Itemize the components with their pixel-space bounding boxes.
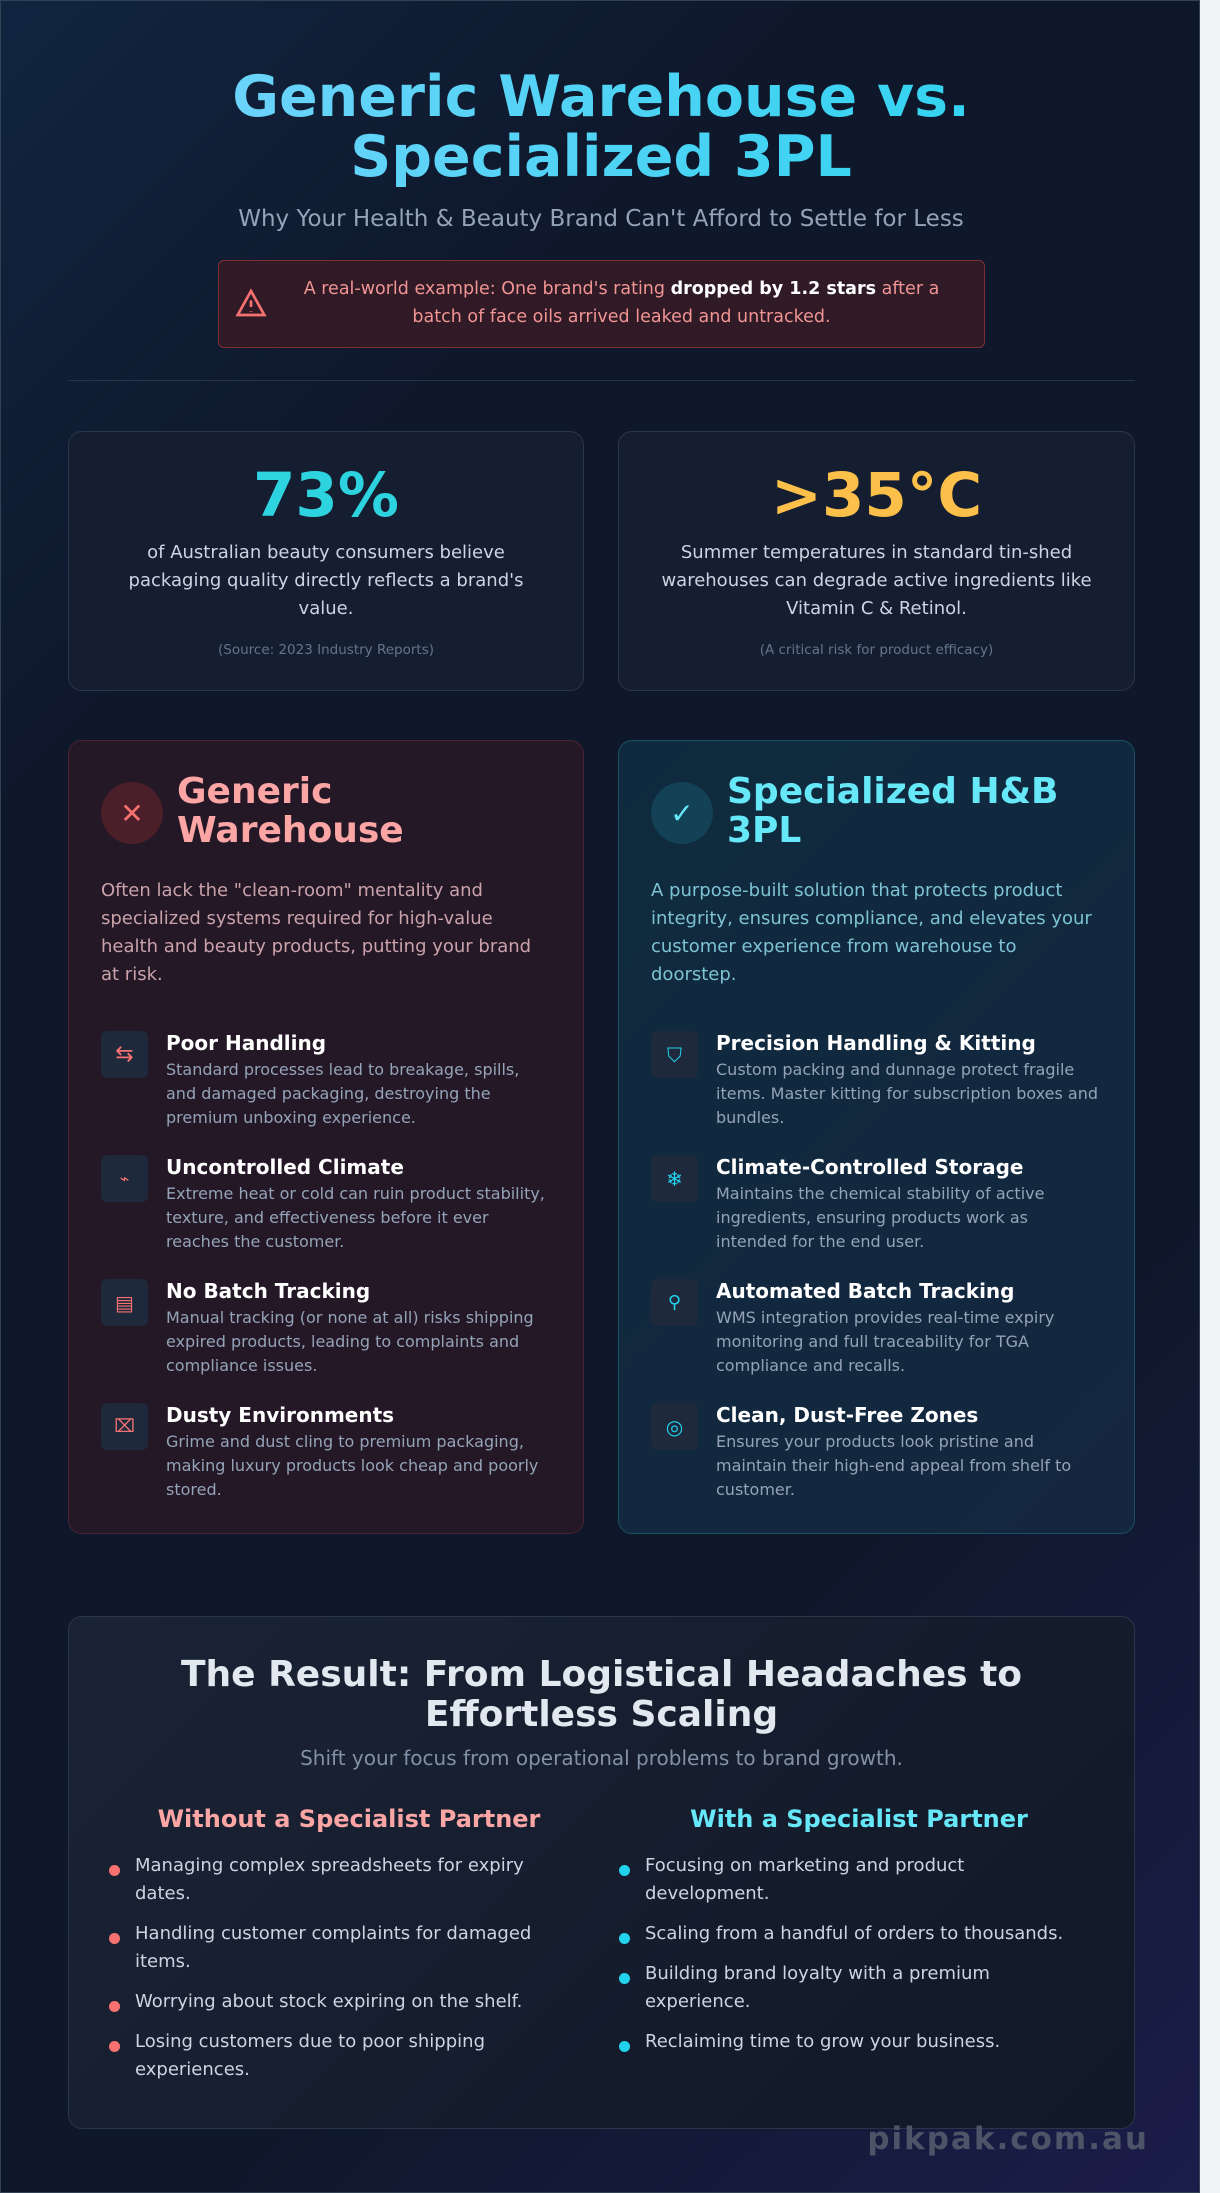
column: with: Scaling from a handful of orders to thousands. [645, 1923, 1063, 1944]
column: with: Focusing on marketing and product development. [645, 1855, 964, 1904]
item: climate storage: ❄ [666, 1166, 683, 1190]
heading: Generic [177, 771, 332, 812]
icon: x: ✕ [120, 796, 144, 830]
item: dust-free: ◎ [666, 1414, 683, 1438]
column: without: Worrying about stock expiring on the shelf. [135, 1991, 522, 2012]
item: dust-free [651, 1403, 1071, 1499]
column: with: Reclaiming time to grow your business. [645, 2031, 1000, 2052]
item: batch tracking: ⚲ [668, 1292, 681, 1313]
stat card: >35°C: Summer temperatures in standard tin-shed warehouses can degrade active ingredients like Vitamin C & Retinol. [661, 542, 1092, 619]
callout: real-world example: A real-world example: One brand's rating dropped by 1.2 stars after a batch of face oils arrived leaked and untracked. [304, 279, 939, 327]
column: with [619, 1805, 1063, 2052]
callout: real-world example [218, 260, 985, 348]
item: no batch tracking: ▤ [115, 1290, 134, 1314]
item: poor handling: Poor Handling [166, 1031, 326, 1055]
stat card: >35°C: (A critical risk for product efficacy) [760, 642, 993, 658]
icon: check [651, 782, 713, 844]
item: precision handling [651, 1031, 1098, 1127]
item: no batch tracking: Manual tracking (or none at all) risks shipping expired products, leading to complaints and compliance issues. [166, 1308, 534, 1375]
heading: 3PL [727, 810, 801, 851]
item: dust-free: Ensures your products look pristine and maintain their high-end appeal from shelf to customer. [716, 1432, 1071, 1499]
item: dusty environments: Grime and dust cling to premium packaging, making luxury products look cheap and poorly stored. [166, 1432, 538, 1499]
item: uncontrolled climate: ⌁ [120, 1169, 129, 1188]
heading: Effortless Scaling [425, 1694, 778, 1735]
column: with: With a Specialist Partner [690, 1805, 1028, 1833]
icon: x [101, 782, 163, 844]
stat card: 73%: 73% [253, 460, 399, 531]
icon: check: ✓ [670, 796, 694, 830]
heading [181, 1654, 1022, 1735]
item: precision handling: Precision Handling & Kitting [716, 1031, 1036, 1055]
item: uncontrolled climate: Extreme heat or cold can ruin product stability, texture, and effectiveness before it ever reaches the customer. [166, 1184, 545, 1251]
item: poor handling: Standard processes lead to breakage, spills, and damaged packaging, destroying the premium unboxing experience. [166, 1060, 519, 1127]
footer: brand: pikpak.com.au [867, 2121, 1149, 2157]
panel: generic warehouse [68, 740, 584, 1534]
item: batch tracking: Automated Batch Tracking [716, 1279, 1014, 1303]
column: without [109, 1805, 540, 2080]
heading [727, 771, 1058, 851]
description: Often lack the "clean-room" mentality and specialized systems required for high-value health and beauty products, putting your brand at risk. [101, 880, 531, 985]
column: without: Without a Specialist Partner [158, 1805, 540, 1833]
title: Generic Warehouse vs. [232, 64, 970, 130]
item: dusty environments: ⌧ [114, 1416, 135, 1437]
item: uncontrolled climate [101, 1155, 545, 1251]
column: with: Building brand loyalty with a premium experience. [645, 1963, 990, 2012]
item: climate storage [651, 1155, 1044, 1251]
subtitle: Why Your Health & Beauty Brand Can't Afford to Settle for Less [238, 206, 964, 232]
item: climate storage: Maintains the chemical stability of active ingredients, ensuring products work as intended for the end user. [716, 1184, 1044, 1251]
description: A purpose-built solution that protects product integrity, ensures compliance, and elevates your customer experience from warehouse to doorstep. [651, 880, 1092, 985]
heading: Specialized H&B [727, 771, 1058, 812]
heading [177, 771, 404, 851]
item: poor handling [101, 1031, 519, 1127]
title [1, 67, 1201, 187]
column: without: Losing customers due to poor shipping experiences. [135, 2031, 485, 2080]
item: climate storage: Climate-Controlled Storage [716, 1155, 1023, 1179]
stat card: 73%: of Australian beauty consumers believe packaging quality directly reflects a brand's value. [129, 542, 523, 619]
item: uncontrolled climate: Uncontrolled Climate [166, 1155, 404, 1179]
stat card: >35°C: >35°C [771, 460, 982, 531]
column: without: Managing complex spreadsheets for expiry dates. [135, 1855, 524, 1904]
stat card: 73%: (Source: 2023 Industry Reports) [218, 642, 434, 658]
item: precision handling: ⛉ [667, 1042, 682, 1066]
item: dusty environments: Dusty Environments [166, 1403, 394, 1427]
icon: warning [236, 288, 266, 316]
title: Specialized 3PL [350, 124, 852, 190]
heading: Warehouse [177, 810, 404, 851]
panel: the result [68, 1616, 1135, 2129]
heading: The Result: From Logistical Headaches to [181, 1654, 1022, 1695]
item: dust-free: Clean, Dust-Free Zones [716, 1403, 978, 1427]
stat card: 73% [68, 431, 584, 691]
item: no batch tracking [101, 1279, 534, 1375]
panel: specialized 3PL [618, 740, 1135, 1534]
stat card: >35°C [618, 431, 1135, 691]
item: dusty environments [101, 1403, 538, 1499]
item: precision handling: Custom packing and dunnage protect fragile items. Master kitting for subscription boxes and bundles. [716, 1060, 1098, 1127]
item: no batch tracking: No Batch Tracking [166, 1279, 370, 1303]
item: batch tracking [651, 1279, 1054, 1375]
column: without: Handling customer complaints for damaged items. [135, 1923, 531, 1972]
item: batch tracking: WMS integration provides real-time expiry monitoring and full traceability for TGA compliance and recalls. [716, 1308, 1054, 1375]
item: poor handling: ⇆ [115, 1042, 134, 1067]
subheading: Shift your focus from operational problems to brand growth. [300, 1746, 903, 1770]
